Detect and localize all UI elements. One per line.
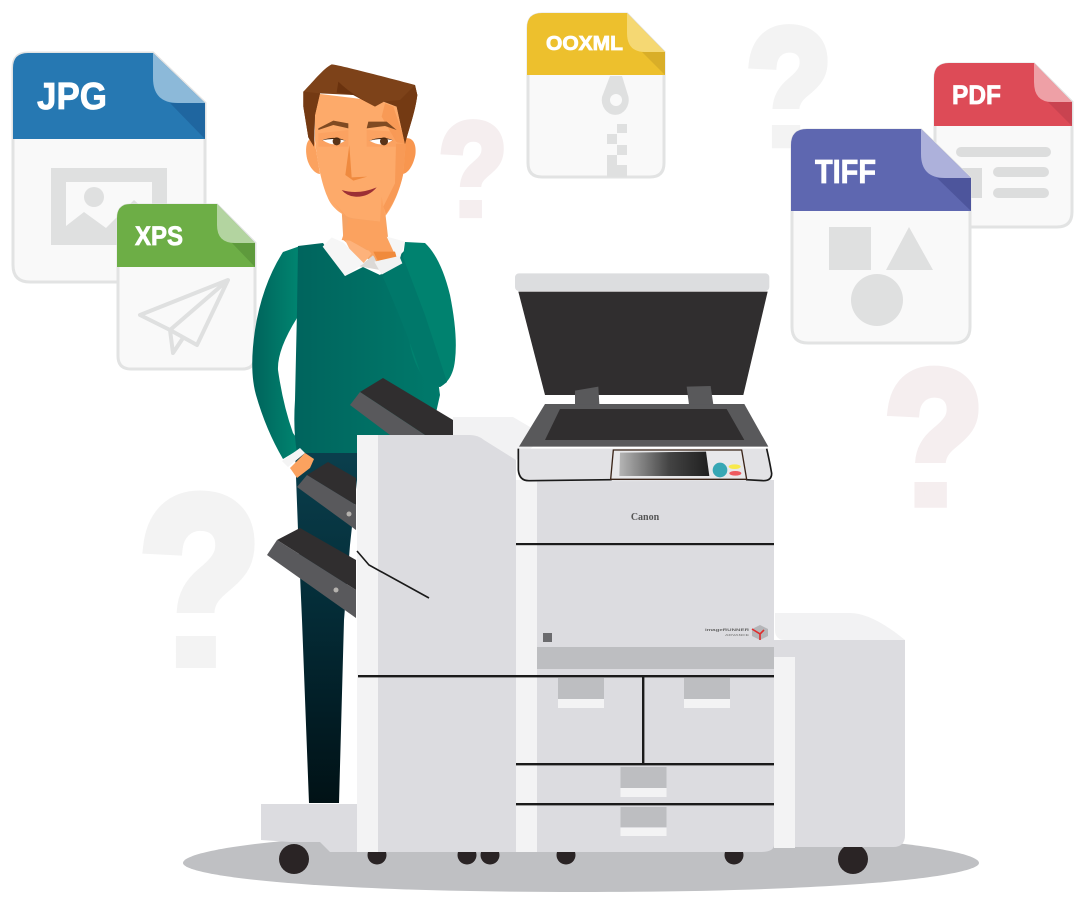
control panel housing: [518, 449, 772, 482]
printer base cart: [261, 804, 357, 852]
file icon: PDF: [934, 63, 1072, 227]
icon: shapes: [829, 227, 933, 326]
shirt cuff: [282, 448, 305, 467]
printer main body: [358, 480, 774, 852]
imageRUNNER logo: [705, 625, 768, 640]
output tray: top: [350, 378, 453, 435]
question mark: left: ?: [140, 449, 260, 710]
sweater torso: [294, 243, 440, 453]
label: PDF: PDF: [952, 80, 1001, 110]
nose: [345, 145, 367, 181]
head: [303, 64, 417, 276]
hand on chin: [332, 197, 397, 262]
mouth: [342, 187, 377, 197]
label: OOXML: OOXML: [546, 33, 623, 55]
imageRUNNER logo: ADVANCE: [725, 633, 749, 637]
eyes: [322, 137, 393, 145]
panel buttons: [713, 463, 741, 477]
side paper unit: [774, 613, 905, 848]
sweater left arm: [252, 246, 303, 459]
eyebrows: [318, 121, 397, 130]
trousers: [295, 450, 357, 803]
man: [252, 64, 456, 803]
scanner base: [519, 404, 768, 447]
panel lines: [358, 543, 774, 805]
file icon: TIFF: [791, 129, 971, 343]
file icon: OOXML: [527, 13, 665, 177]
label: TIFF: TIFF: [815, 153, 876, 190]
floor shadow: [183, 838, 979, 892]
drawer handles: [558, 678, 730, 836]
finisher slot: [357, 551, 429, 598]
question mark: right: ?: [885, 332, 983, 542]
file icon: JPG: [13, 53, 205, 282]
file icon: XPS: [117, 204, 255, 369]
power button: [543, 633, 552, 642]
hinges: [575, 386, 713, 405]
touch panel: [611, 450, 747, 479]
Canon wordmark: Canon: [631, 512, 660, 523]
ears: [306, 137, 416, 174]
wheels: [279, 844, 868, 874]
label: JPG: JPG: [37, 76, 107, 118]
icon: zipper: [602, 76, 629, 177]
collar cuff: [374, 256, 402, 275]
icon: picture: [51, 168, 167, 245]
scanner: [515, 273, 772, 482]
toner band: [537, 647, 774, 669]
question mark: top centre: ?: [439, 96, 507, 242]
output tray: bottom: [267, 528, 356, 618]
question mark: top right: ?: [747, 0, 831, 178]
hand at side: [290, 453, 314, 478]
imageRUNNER logo: imageRUNNER: [705, 627, 749, 632]
face: [315, 93, 406, 222]
sweater right arm: [383, 242, 456, 387]
scanner glass: [545, 409, 744, 440]
finisher unit: [357, 435, 516, 852]
scanner lid: [515, 273, 769, 395]
icon: document lines: [956, 147, 1051, 198]
touch screen: [619, 452, 709, 476]
icon: paper plane: [140, 280, 228, 353]
finisher back top: [453, 417, 535, 460]
output tray: middle: [297, 462, 356, 530]
hair: [303, 64, 417, 147]
neck and collar: [323, 210, 405, 276]
label: XPS: XPS: [135, 221, 183, 251]
